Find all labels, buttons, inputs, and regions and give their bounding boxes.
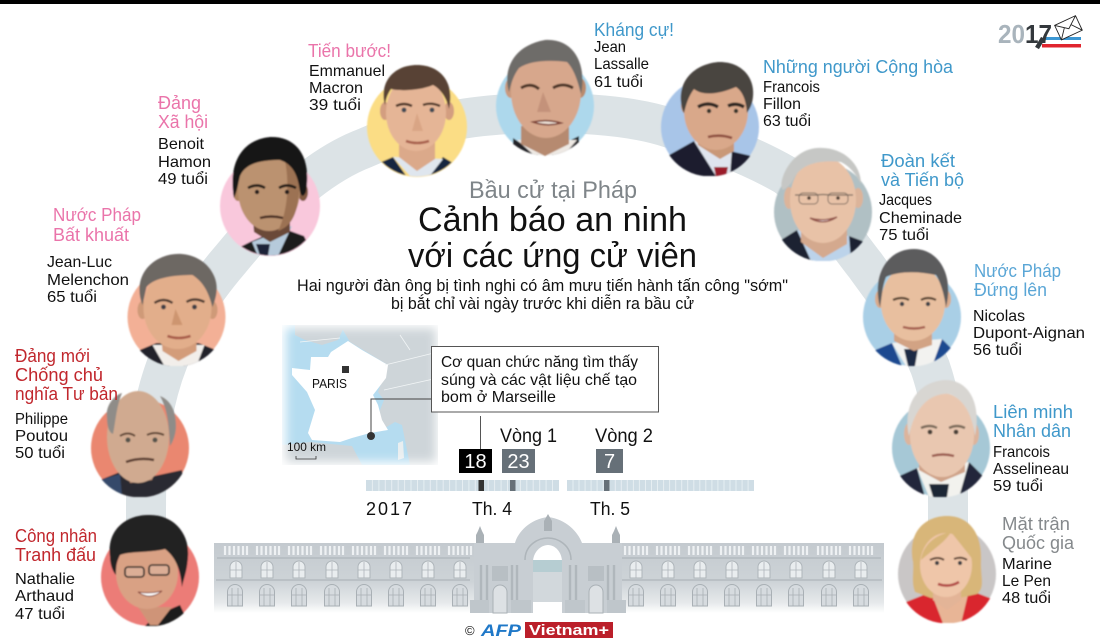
label: Asselineau: Asselineau (993, 461, 1069, 478)
callout: bom ở Marseille (441, 389, 556, 406)
label: Hamon: 49 tuổi (158, 170, 208, 188)
Paris marker (342, 366, 349, 373)
logo: 2017 election (998, 16, 1082, 49)
candidate: Marine Le Pen (898, 514, 1075, 623)
label: Lassalle: Kháng cự! (594, 20, 674, 40)
label: Cheminade: Đoàn kết (881, 151, 955, 171)
year and month labels: Th. 5 (590, 499, 630, 519)
title block (297, 177, 788, 313)
headline: Cảnh báo an ninh (418, 201, 687, 239)
label: Lassalle: 61 tuổi (594, 73, 643, 91)
label: Poutou (15, 346, 118, 462)
label: Melenchon: Melenchon (47, 272, 129, 289)
label: Dupont-Aignan: Dupont-Aignan (973, 325, 1085, 342)
label: Fillon: Francois (763, 79, 820, 96)
upper windows (230, 561, 867, 578)
label: Cheminade: 75 tuổi (879, 226, 929, 244)
subtitle: Hai người đàn ông bị tình nghi có âm mưu tiến hành tấn công "sớm" (297, 277, 788, 295)
label: Cheminade: Cheminade (879, 210, 962, 227)
label: Arthaud: 47 tuổi (15, 605, 65, 623)
label: Poutou: nghĩa Tư bản (15, 384, 118, 404)
callout: Cơ quan chức năng tìm thấy (441, 354, 638, 371)
central pavilion (470, 517, 626, 613)
portrait: Arthaud (101, 515, 199, 626)
date box 23 (502, 449, 535, 473)
portrait: Melenchon (128, 254, 226, 366)
candidate: Jacques Cheminade (774, 148, 964, 261)
label: Fillon: Fillon (763, 96, 801, 113)
label: Dupont-Aignan: Đứng lên (974, 280, 1047, 300)
label: Hamon: Xã hội (158, 112, 208, 132)
headline (408, 201, 697, 275)
marker 7 (604, 480, 610, 491)
label: Le Pen: Quốc gia (1002, 533, 1075, 553)
label: Le Pen: Marine (1002, 556, 1052, 573)
label: Lassalle: Lassalle (594, 56, 649, 73)
top black bar (0, 0, 1100, 4)
round labels: Vòng 2 (595, 426, 653, 447)
May bar (567, 480, 754, 491)
scale: 100 km (287, 440, 326, 454)
Vietnam+ logo (525, 622, 613, 639)
balustrade (225, 546, 872, 555)
date box 7 (596, 449, 623, 473)
Elysee palace illustration (214, 514, 884, 613)
portrait: Le Pen (898, 516, 996, 623)
portrait: Fillon (661, 62, 759, 177)
portrait: Dupont-Aignan (863, 249, 961, 366)
label: Dupont-Aignan: Nicolas (973, 308, 1025, 325)
credits: © (465, 623, 475, 638)
statues (476, 514, 620, 543)
marker 18 (478, 480, 484, 491)
date box 23: 23 (507, 451, 530, 473)
Vietnam+ logo: Vietnam+ (529, 623, 609, 639)
label: Le Pen (1002, 514, 1075, 607)
candidate: Benoit Hamon (158, 93, 320, 256)
April bar (366, 480, 559, 491)
label: Asselineau: Nhân dân (993, 421, 1071, 441)
label: Macron (308, 41, 391, 114)
label: Fillon: 63 tuổi (763, 112, 811, 130)
candidate: Francois Asselineau (892, 380, 1073, 497)
label: Macron: Emmanuel (309, 63, 385, 80)
Marseille dot (367, 432, 375, 440)
subtitle: bị bắt chỉ vài ngày trước khi diễn ra bầu cử (391, 294, 694, 313)
label: Poutou: 50 tuổi (15, 444, 65, 462)
label: Cheminade: và Tiến bộ (881, 170, 964, 190)
lower windows (228, 584, 868, 606)
label: Poutou: Chống chủ (15, 365, 103, 385)
AFP logo: AFP (480, 621, 522, 640)
candidate: Nathalie Arthaud (15, 515, 199, 626)
date box 7: 7 (604, 451, 615, 473)
label: Poutou: Poutou (15, 428, 68, 445)
round labels (500, 426, 653, 447)
timeline (366, 416, 754, 519)
portrait: Poutou (91, 391, 189, 497)
candidate: Nicolas Dupont-Aignan (863, 249, 1085, 366)
candidate: Philippe Poutou (15, 346, 189, 497)
label: Melenchon: Bất khuất (53, 225, 129, 245)
portrait: Hamon (220, 137, 320, 256)
label: Macron: 39 tuổi (309, 96, 361, 114)
portrait: Macron (367, 65, 467, 177)
date box 18 (459, 449, 492, 473)
label: Hamon (158, 93, 211, 188)
label: Cheminade (879, 151, 964, 244)
wings (214, 543, 884, 613)
Paris label: PARIS (312, 376, 347, 391)
headline: với các ứng cử viên (408, 237, 697, 275)
label: Dupont-Aignan (973, 261, 1085, 359)
label: Asselineau (993, 402, 1073, 495)
credits (465, 621, 613, 640)
logo: 2017 election: 17 (1025, 19, 1052, 49)
marker 23 (510, 480, 516, 491)
label: Macron: Macron (309, 80, 363, 97)
callout: súng và các vật liệu chế tạo (441, 372, 637, 389)
label: Le Pen: Le Pen (1002, 573, 1051, 590)
label: Hamon: Benoit (158, 136, 205, 153)
portrait: Lassalle (496, 40, 594, 156)
year and month labels: 2017 (366, 499, 412, 519)
label: Dupont-Aignan: Nước Pháp (974, 261, 1061, 281)
label: Melenchon (47, 205, 141, 306)
label: Fillon (763, 57, 954, 130)
callout (432, 346, 658, 412)
label: Poutou: Philippe (15, 411, 68, 428)
label: Asselineau: 59 tuổi (993, 477, 1043, 495)
portrait: Cheminade (774, 148, 872, 261)
label: Fillon: Những người Cộng hòa (763, 57, 954, 77)
label: Arthaud: Công nhân (15, 526, 97, 546)
candidate: Jean-Luc Melenchon (47, 205, 226, 366)
label: Arthaud: Tranh đấu (15, 545, 96, 565)
logo: 2017 election: 20 (998, 19, 1025, 49)
candidate: Jean Lassalle (496, 20, 674, 156)
label: Asselineau: Liên minh (993, 402, 1073, 422)
arc band linking the candidates (146, 113, 948, 590)
subtitle (297, 277, 788, 313)
label: Cheminade: Jacques (879, 192, 932, 209)
label: Le Pen: 48 tuổi (1002, 589, 1051, 607)
label: Poutou: Đảng mới (15, 346, 90, 366)
label: Melenchon: 65 tuổi (47, 288, 97, 306)
label: Hamon: Hamon (158, 154, 211, 171)
label: Melenchon: Nước Pháp (53, 205, 141, 225)
kicker: Bầu cử tại Pháp (469, 177, 637, 204)
label: Asselineau: Francois (993, 444, 1050, 461)
date box 18: 18 (464, 451, 487, 473)
label: Lassalle (594, 20, 674, 91)
year and month labels: Th. 4 (472, 499, 512, 519)
label: Arthaud: Nathalie (15, 571, 75, 588)
label: Macron: Tiến bước! (308, 41, 391, 61)
label: Arthaud (15, 526, 97, 623)
candidate: Emmanuel Macron (308, 41, 467, 177)
candidate: Francois Fillon (661, 57, 954, 177)
label: Lassalle: Jean (594, 39, 626, 56)
Marseille leader line (371, 399, 432, 436)
year and month labels (366, 499, 630, 519)
portrait: Asselineau (892, 380, 990, 497)
label: Hamon: Đảng (158, 93, 201, 113)
label: Le Pen: Mặt trận (1002, 514, 1070, 534)
label: Arthaud: Arthaud (15, 588, 74, 605)
round labels: Vòng 1 (500, 426, 557, 447)
map of France (282, 325, 438, 465)
label: Melenchon: Jean-Luc (47, 254, 112, 271)
label: Dupont-Aignan: 56 tuổi (973, 341, 1022, 359)
